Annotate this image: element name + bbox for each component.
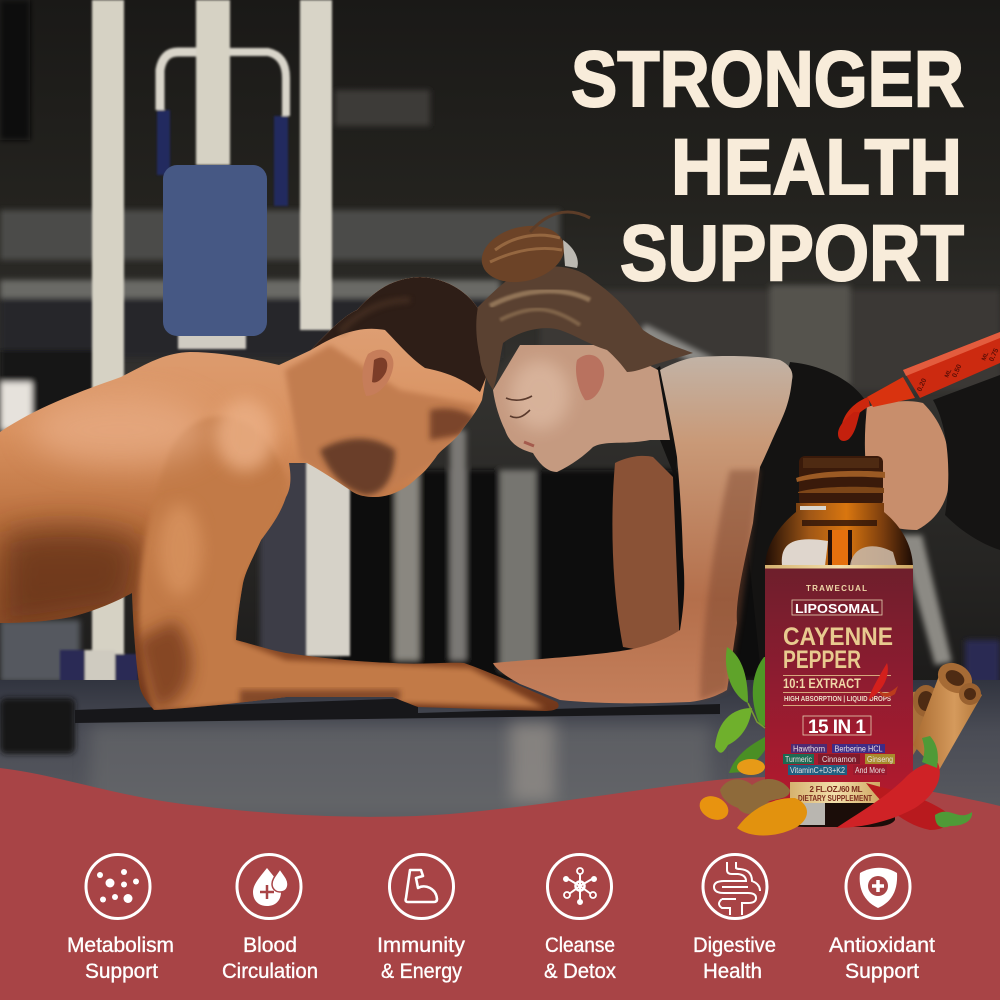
- product name: CAYENNE: [783, 623, 893, 651]
- benefit: cleanse and detox: Cleanse: [545, 934, 615, 957]
- man: neck and face: [285, 345, 480, 497]
- man: arm highlights: [215, 399, 275, 471]
- woman's black top: [646, 362, 905, 665]
- benefit: digestive health: Digestive: [693, 934, 776, 957]
- dropper: [838, 332, 1000, 441]
- bottle: HIGH ABSORPTION | LIQUID DROPS: [784, 696, 891, 703]
- woman: ear: [576, 355, 604, 400]
- bottle label: [765, 568, 913, 802]
- man: shoulder and arm: [139, 417, 545, 712]
- ingredient tags: Turmeric: [785, 755, 812, 764]
- bottle: [765, 456, 913, 827]
- benefit: immunity and energy: & Energy: [381, 960, 462, 983]
- woman's leg: [865, 401, 950, 530]
- woman in plank: [476, 212, 792, 703]
- benefit: blood circulation: Circulation: [222, 960, 318, 983]
- bottle glass: [765, 503, 913, 568]
- icon: molecule: [548, 854, 612, 918]
- icon: chili peppers: [836, 736, 972, 830]
- woman's black shorts: [933, 375, 1000, 550]
- icon: green leaves: [715, 647, 765, 773]
- ingredient tags: Hawthorn: [793, 744, 825, 754]
- dropper: ML: [944, 368, 953, 379]
- product name: PEPPER: [783, 646, 861, 674]
- icon: intestines: [703, 854, 767, 918]
- benefit: immunity and energy: Immunity: [377, 934, 466, 957]
- icon: shield with cross: [846, 854, 910, 918]
- floor: [0, 680, 1000, 830]
- label chili: [868, 663, 888, 700]
- ingredient tags: Berberine HCL: [834, 744, 883, 754]
- bottle cap neck: [799, 456, 883, 506]
- benefit: immunity and energy: [377, 854, 466, 983]
- gold band: DIETARY SUPPLEMENT: [798, 794, 872, 803]
- icon: turmeric root and powder: [696, 759, 807, 836]
- man: torso shadow: [0, 526, 145, 630]
- benefit: antioxidant support: [829, 854, 935, 983]
- ingredient tags: And More: [855, 766, 885, 775]
- benefit: cleanse and detox: & Detox: [544, 960, 616, 983]
- icon: flexed arm: [390, 854, 454, 918]
- benefit: blood circulation: Blood: [243, 934, 297, 957]
- title: SUPPORT: [620, 208, 964, 297]
- ingredient tags: Cinnamon: [822, 755, 856, 764]
- woman: head and neck: [493, 345, 670, 472]
- gold band: 2 FL.OZ./60 ML: [810, 785, 863, 794]
- ingredient tags: VitaminC+D3+K2: [790, 766, 845, 775]
- bottle base: [785, 800, 895, 827]
- woman's far arm: [612, 456, 680, 652]
- woman: hair: [476, 266, 693, 390]
- extract: 10:1 EXTRACT: [783, 676, 862, 691]
- man: ear: [362, 350, 393, 396]
- exercise mat: [75, 698, 720, 723]
- dropper: 0.50: [951, 363, 963, 379]
- product name: [783, 623, 893, 674]
- benefit: blood circulation: [222, 854, 318, 983]
- drop: [838, 412, 860, 441]
- benefit: metabolism support: [67, 854, 174, 983]
- icon: blood drops: [237, 854, 301, 918]
- benefit: digestive health: [693, 854, 776, 983]
- gold band: [790, 782, 880, 803]
- brand: TRAWECUAL: [806, 584, 867, 593]
- gym background: [0, 0, 1000, 700]
- man in plank: [0, 277, 559, 712]
- ingredient tags: [783, 744, 895, 775]
- 15 in 1: 15 IN 1: [808, 717, 866, 738]
- benefit: cleanse and detox: [544, 854, 616, 983]
- title: HEALTH: [671, 122, 962, 211]
- ingredient tags: Ginseng: [867, 755, 893, 764]
- woman: hair bun: [476, 218, 570, 290]
- man: hair: [311, 277, 490, 392]
- benefit: metabolism support: Metabolism: [67, 934, 174, 957]
- red wave panel: [0, 768, 1000, 1000]
- icon: cinnamon sticks: [913, 657, 982, 772]
- liposomal badge: LIPOSOMAL: [795, 601, 879, 616]
- dropper: 0.20: [916, 377, 928, 393]
- blue seat pad: [163, 165, 267, 336]
- benefit: metabolism support: Support: [85, 960, 158, 983]
- title: [571, 34, 964, 297]
- benefit: digestive health: Health: [703, 960, 762, 983]
- benefit: antioxidant support: Support: [845, 960, 919, 983]
- icon: metabolism dots: [86, 854, 150, 918]
- dropper: ML: [981, 351, 990, 362]
- benefit: antioxidant support: Antioxidant: [829, 934, 935, 957]
